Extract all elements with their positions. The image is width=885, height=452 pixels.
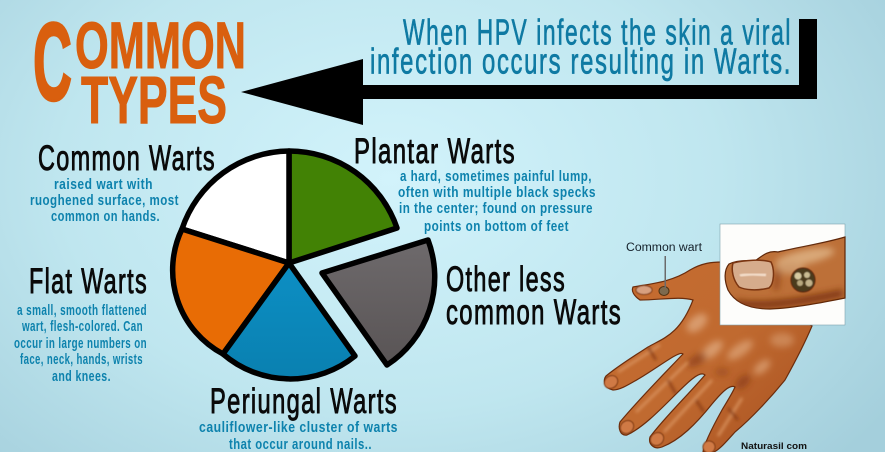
arrow pointing to title <box>241 19 817 125</box>
title: common types: C <box>33 1 72 124</box>
title: common types: OMMON <box>75 8 246 82</box>
slice: common warts (white) <box>182 151 289 263</box>
label: flat warts: face, neck, hands, wrists <box>20 352 143 368</box>
label: common warts: Common Warts <box>38 139 216 178</box>
label: flat warts: Flat Warts <box>29 262 148 301</box>
label: flat warts: a small, smooth flattened <box>17 303 147 319</box>
title: common types: TYPES <box>81 63 227 138</box>
label: other less common warts: Other less <box>446 260 566 299</box>
naturasil credit: Naturasil com <box>741 441 807 452</box>
thumbnail <box>732 260 773 290</box>
common wart caption: Common wart <box>626 242 703 254</box>
label: plantar warts: points on bottom of feet <box>424 219 569 235</box>
label: common warts: common on hands. <box>51 209 160 225</box>
thumb close-up <box>725 237 845 309</box>
pie chart <box>173 151 435 379</box>
pointer line <box>664 256 666 288</box>
inset: wart close-up <box>720 224 845 325</box>
label: common warts <box>30 139 216 225</box>
label: flat warts: occur in large numbers on <box>14 336 147 352</box>
fingernails <box>602 286 717 452</box>
slice: other warts (gray, pulled out) <box>322 240 435 365</box>
label: common warts: ruoghened surface, most <box>30 193 179 209</box>
label: plantar warts <box>354 132 596 235</box>
illustration: hand with wart <box>602 242 812 452</box>
wart close-up <box>791 268 815 292</box>
label: flat warts: and knees. <box>52 369 111 385</box>
label: common warts: raised wart with <box>54 177 153 193</box>
label: periungal warts <box>199 382 398 452</box>
headline: HPV statement <box>370 12 792 82</box>
slice: plantar warts (green) <box>289 151 397 263</box>
label: plantar warts: Plantar Warts <box>354 132 516 171</box>
label: flat warts <box>14 262 148 385</box>
hand silhouette <box>604 262 812 452</box>
wart on thumb <box>659 286 669 296</box>
label: other less common warts <box>446 260 622 332</box>
label: plantar warts: often with multiple black specks <box>398 185 596 201</box>
label: periungal warts: cauliflower-like cluster of warts <box>199 420 398 436</box>
slice: periungal warts (blue) <box>223 263 355 379</box>
slice: flat warts (orange) <box>173 229 289 354</box>
title: common types <box>33 1 246 138</box>
label: periungal warts: Periungal Warts <box>210 382 398 421</box>
label: plantar warts: a hard, sometimes painful lump, <box>400 169 592 185</box>
label: plantar warts: in the center; found on pressure <box>399 201 593 217</box>
label: flat warts: wart, flesh-colored. Can <box>21 319 143 335</box>
label: other less common warts: common Warts <box>446 293 622 332</box>
